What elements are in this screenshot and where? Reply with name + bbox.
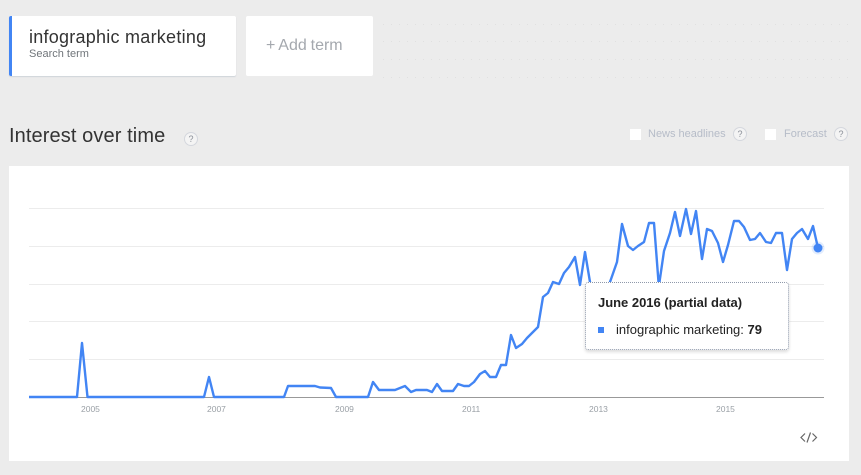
icon: help: ? <box>188 134 194 144</box>
icon: forecast help: ? <box>838 129 844 139</box>
data line <box>29 209 818 397</box>
icon: help <box>184 132 198 146</box>
tooltip title: June 2016 (partial data) <box>598 295 742 310</box>
tooltip value: infographic marketing: 79 <box>616 322 762 337</box>
search term caption: Search term <box>29 48 89 60</box>
x axis labels: 2005 <box>81 404 100 414</box>
label: news headlines: News headlines <box>648 128 726 140</box>
icon: forecast help <box>834 127 848 141</box>
x axis labels <box>81 404 735 414</box>
x axis labels: 2013 <box>589 404 608 414</box>
label: forecast: Forecast <box>784 128 827 140</box>
heading: interest over time: Interest over time <box>9 125 165 147</box>
x axis labels: 2009 <box>335 404 354 414</box>
tooltip <box>585 282 789 350</box>
search term card <box>9 16 236 76</box>
checkbox: forecast <box>765 129 776 140</box>
panel: chart card <box>9 166 849 461</box>
checkbox: news headlines <box>630 129 641 140</box>
x axis labels: 2007 <box>207 404 226 414</box>
tooltip legend swatch <box>598 327 604 333</box>
icon: news help: ? <box>737 129 742 139</box>
add term label: + Add term <box>266 37 343 54</box>
blue accent bar <box>9 16 12 76</box>
icon: news help <box>733 127 747 141</box>
icon: embed code <box>801 432 816 442</box>
end point marker <box>812 242 824 254</box>
x axis labels: 2015 <box>716 404 735 414</box>
add term card <box>246 16 373 76</box>
x axis labels: 2011 <box>462 404 481 414</box>
search term name: infographic marketing <box>29 27 206 47</box>
